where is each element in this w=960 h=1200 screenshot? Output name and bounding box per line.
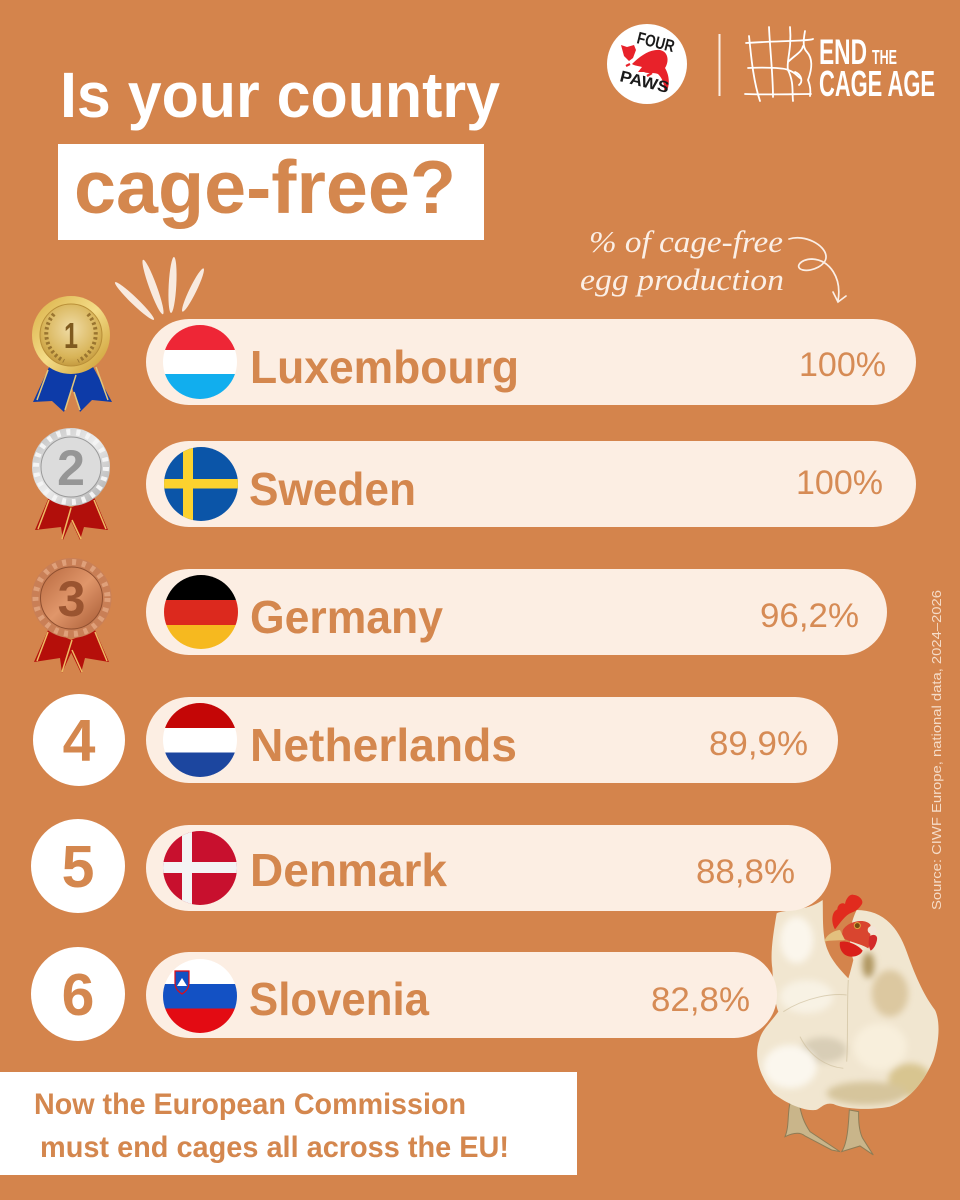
decorative sparks (113, 257, 207, 322)
call to action banner: must end cages all across the EU! (40, 1131, 509, 1164)
rank badge: 5 (31, 819, 125, 913)
flag: Slovenia (160, 959, 240, 1034)
flag: Sweden (160, 447, 240, 521)
illustration: hen (757, 895, 939, 1155)
flag: Netherlands (160, 703, 240, 778)
row 6: Slovenia: 82,8% (651, 981, 750, 1019)
medal: bronze 3 (32, 558, 112, 673)
row 5: Denmark: 88,8% (696, 853, 795, 891)
call to action banner: Now the European Commission (34, 1088, 466, 1121)
medal: silver 2 (32, 428, 110, 540)
hen shading (763, 917, 932, 1105)
annotation: % of cage-free egg production: % of cage-free (589, 224, 783, 259)
row 5: Denmark: Denmark (250, 844, 447, 896)
arrow: curly annotation arrow (789, 238, 846, 302)
row 3: Germany: Germany (250, 591, 443, 643)
row 3: Germany: 96,2% (760, 597, 859, 635)
flag: Denmark (160, 831, 240, 905)
logo: End the Cage Age (745, 27, 935, 104)
row 6: Slovenia (146, 952, 777, 1038)
row 6: Slovenia: Slovenia (249, 973, 429, 1025)
annotation: % of cage-free egg production: egg production (580, 262, 784, 297)
row 2: Sweden: 100% (796, 464, 883, 502)
row 2: Sweden (146, 441, 916, 527)
hen comb (832, 895, 862, 929)
medal: bronze 3: 3 (58, 571, 85, 627)
logo: End the Cage Age: THE (872, 47, 897, 69)
row 1: Luxembourg: Luxembourg (250, 341, 519, 393)
hen legs (785, 1103, 873, 1155)
logo: End the Cage Age: END (819, 33, 867, 72)
row 4: Netherlands: 89,9% (709, 725, 808, 763)
logo: Four Paws: PAWS (618, 68, 671, 97)
row 2: Sweden: Sweden (249, 463, 416, 515)
row 1: Luxembourg: 100% (799, 346, 886, 384)
hen ear (868, 926, 876, 934)
flag: Luxembourg (160, 325, 240, 399)
source note: Source: CIWF Europe, national data, 2024–2026 (929, 590, 944, 910)
rank badge: 6: 6 (62, 962, 94, 1028)
row 5: Denmark (146, 825, 831, 911)
medal: silver 2: 2 (57, 440, 85, 496)
logo: Four Paws (607, 24, 687, 104)
call to action banner (0, 1072, 577, 1175)
rank badge: 4: 4 (63, 708, 96, 774)
row 4: Netherlands: Netherlands (250, 719, 517, 771)
rank badge: 5: 5 (62, 834, 94, 900)
annotation: % of cage-free egg production (580, 224, 784, 297)
row 4: Netherlands (146, 697, 838, 783)
row 1: Luxembourg (146, 319, 916, 405)
row 3: Germany (146, 569, 887, 655)
medal: gold 1 (32, 296, 112, 412)
logo divider (718, 34, 720, 96)
title highlight: cage-free?: cage-free? (74, 145, 456, 229)
rank badge: 4 (33, 694, 125, 786)
hen body (757, 900, 939, 1110)
flag: Germany (164, 575, 238, 649)
rank badge: 6 (31, 947, 125, 1041)
title line: Is your country: Is your country (60, 59, 500, 131)
medal: gold 1: 1 (64, 315, 78, 356)
hen beak (824, 930, 845, 942)
hen eye (854, 923, 860, 929)
hen wattle (840, 942, 863, 957)
logo: Four Paws: FOUR (635, 28, 677, 56)
hen face (842, 921, 871, 948)
hen right wattle (869, 935, 877, 951)
